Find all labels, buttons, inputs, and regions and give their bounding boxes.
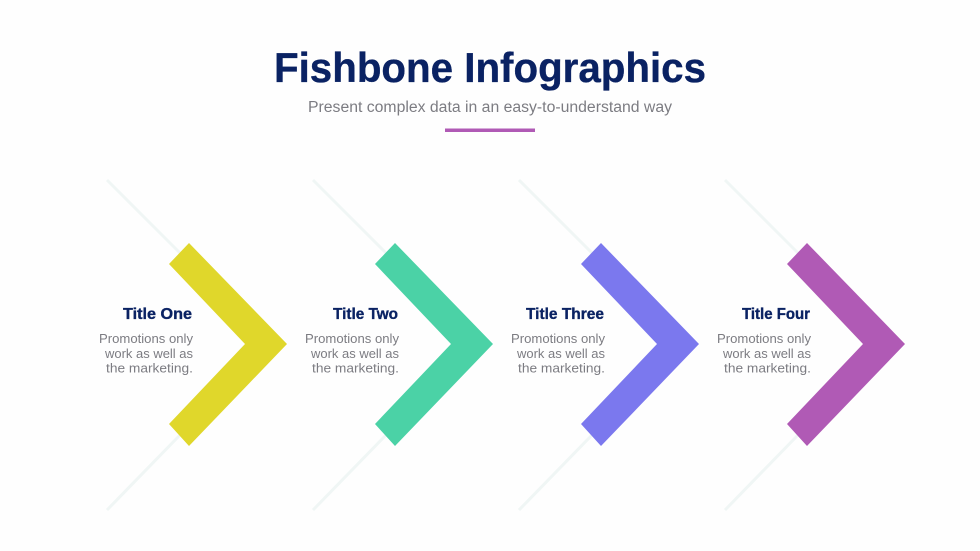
chevron two	[375, 243, 493, 446]
text four: work as well as	[722, 347, 811, 361]
text one: Promotions only	[99, 332, 194, 346]
text three: Promotions only	[511, 332, 606, 346]
chevron three	[581, 243, 699, 446]
fishbone lines two	[313, 180, 386, 510]
panel: step two	[305, 180, 493, 510]
subtitle: Present complex data in an easy-to-understand way	[308, 99, 672, 116]
chevron one	[169, 243, 287, 446]
heading one: Title One	[123, 306, 192, 323]
panel: step three	[511, 180, 699, 510]
panel: step one	[99, 180, 287, 510]
fishbone lines three	[519, 180, 592, 510]
title underline	[445, 128, 535, 132]
text one: the marketing.	[106, 362, 193, 376]
text two: work as well as	[310, 347, 399, 361]
heading three: Title Three	[526, 306, 604, 323]
fishbone lines one	[107, 180, 180, 510]
text two: the marketing.	[312, 362, 399, 376]
chevron four	[787, 243, 905, 446]
text three	[511, 332, 606, 376]
fishbone lines four	[725, 180, 798, 510]
title: Fishbone Infographics	[274, 44, 706, 91]
text four: Promotions only	[717, 332, 812, 346]
heading two: Title Two	[333, 306, 398, 323]
text one	[99, 332, 194, 376]
text four: the marketing.	[724, 362, 811, 376]
text two: Promotions only	[305, 332, 400, 346]
text two	[305, 332, 400, 376]
text four	[717, 332, 812, 376]
text one: work as well as	[104, 347, 193, 361]
text three: work as well as	[516, 347, 605, 361]
heading four: Title Four	[742, 306, 810, 323]
text three: the marketing.	[518, 362, 605, 376]
panel: step four	[717, 180, 905, 510]
